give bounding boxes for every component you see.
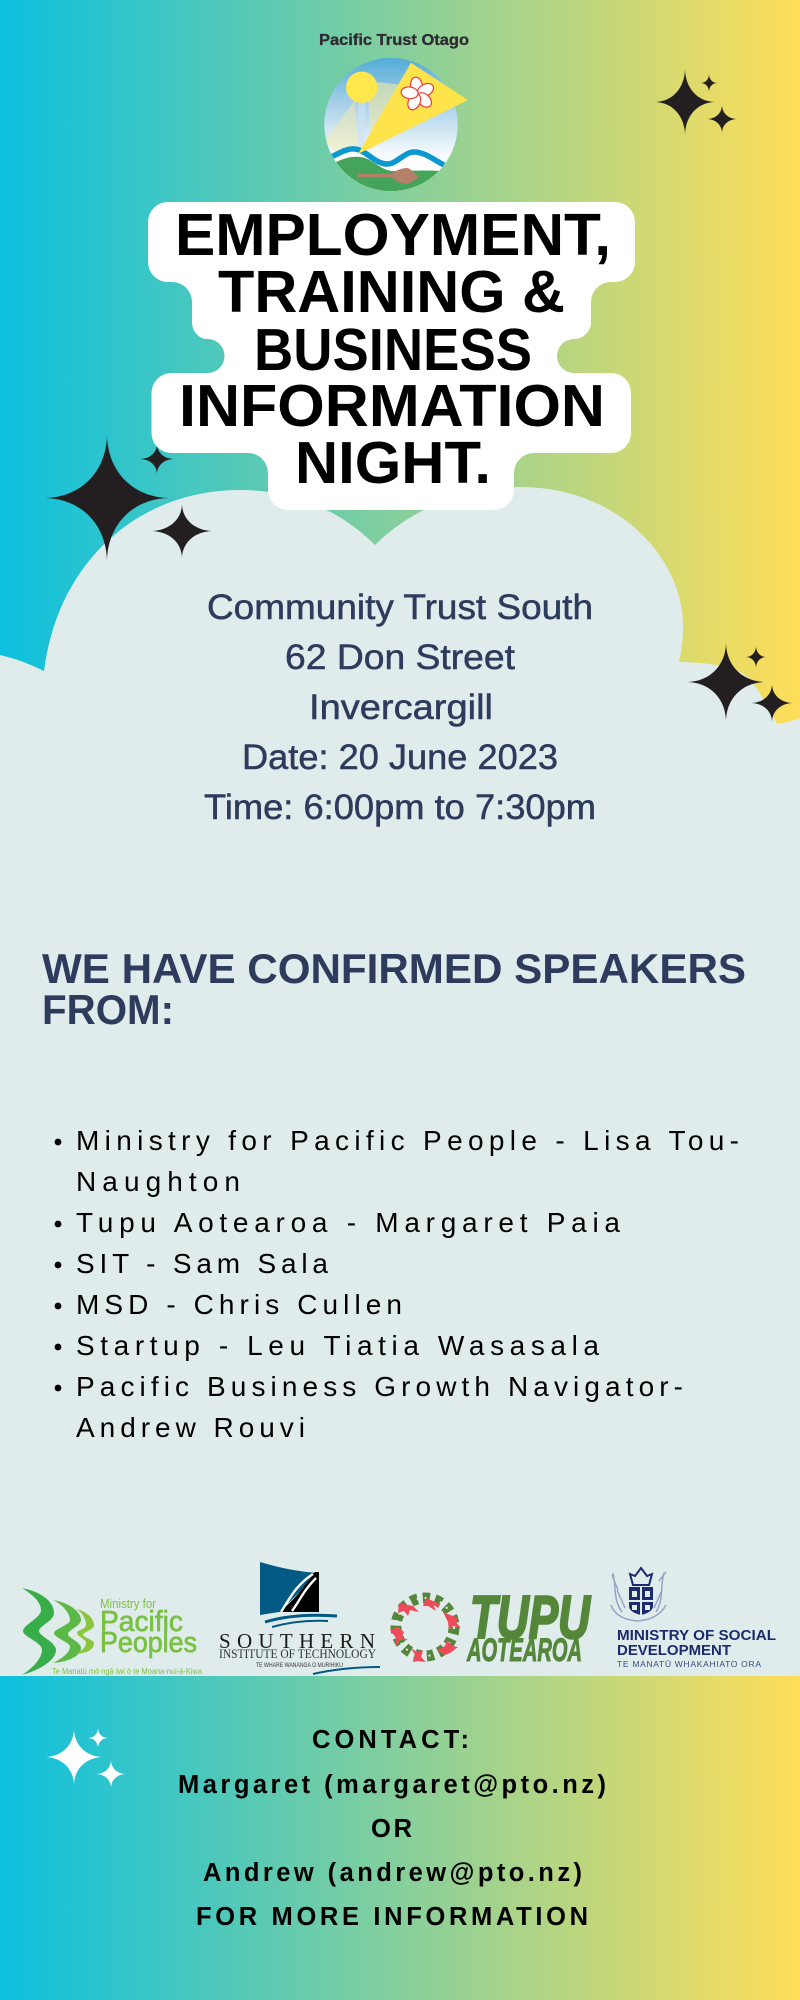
icon: sparkles top right: [655, 69, 737, 135]
venue and time details: [204, 588, 596, 827]
logo: Ministry for Pacific Peoples: Pacific: [100, 1606, 183, 1638]
contact text: Margaret (margaret@pto.nz): [178, 1771, 606, 1799]
contact text: CONTACT:: [312, 1726, 469, 1754]
venue and time details: Community Trust South: [207, 588, 593, 627]
logo: Tupu Aotearoa: [390, 1584, 591, 1668]
title text: EMPLOYMENT,: [175, 202, 611, 268]
speakers list: Naughton: [76, 1166, 240, 1197]
heading: confirmed speakers: [42, 945, 746, 1033]
contact text: FOR MORE INFORMATION: [196, 1903, 588, 1931]
logo: Ministry for Pacific Peoples: Te Manatū mō ngā Iwi ō te Moana-nui-ā-Kiwa: [52, 1666, 202, 1676]
logo: Ministry for Pacific Peoples: Peoples: [100, 1627, 197, 1659]
logo: Ministry for Pacific Peoples: Ministry for: [100, 1596, 157, 1611]
icon: sparkles right of cloud: [687, 643, 793, 722]
venue and time details: Invercargill: [309, 688, 493, 727]
logo: Tupu Aotearoa: TUPU: [470, 1584, 591, 1651]
logo: Southern Institute of Technology: INSTITUTE OF TECHNOLOGY: [219, 1646, 377, 1661]
title text: BUSINESS: [254, 317, 532, 383]
icon: frangipani flower: [400, 76, 436, 112]
contact text: Andrew (andrew@pto.nz): [203, 1859, 582, 1887]
speakers list: Andrew Rouvi: [76, 1412, 305, 1443]
venue and time details: 62 Don Street: [285, 638, 515, 677]
icon: coat of arms: [611, 1568, 666, 1621]
logo: Ministry for Pacific Peoples: [22, 1588, 202, 1676]
logo: Ministry of Social Development: TE MANATŪ WHAKAHIATO ORA: [617, 1659, 761, 1669]
icon: white sparkles footer: [45, 1728, 126, 1788]
heading: confirmed speakers: FROM:: [42, 986, 174, 1033]
logo: Southern Institute of Technology: TE WHARE WANANGA O MURIHIKU: [256, 1663, 343, 1669]
icon: wreath: [390, 1598, 461, 1662]
venue and time details: Time: 6:00pm to 7:30pm: [204, 788, 596, 827]
icon: paddle: [357, 168, 419, 184]
venue and time details: Date: 20 June 2023: [242, 738, 558, 777]
speakers list: Pacific Business Growth Navigator-: [76, 1371, 683, 1402]
organisation name: Pacific Trust Otago: [319, 32, 469, 49]
panel: pale cloud body: [0, 487, 800, 1676]
icon: sparkles left of cloud: [45, 435, 213, 561]
logo: Southern Institute of Technology: SOUTHERN: [219, 1629, 375, 1653]
logo: Ministry of Social Development: MINISTRY OF SOCIAL: [617, 1628, 776, 1644]
contact text: [178, 1726, 606, 1931]
speakers list: MSD - Chris Cullen: [76, 1289, 402, 1320]
speakers list: Tupu Aotearoa - Margaret Paia: [76, 1207, 620, 1238]
panel: contact footer: [0, 1676, 800, 2000]
speakers list: Startup - Leu Tiatia Wasasala: [76, 1330, 599, 1361]
speakers list: SIT - Sam Sala: [76, 1248, 328, 1279]
contact text: OR: [371, 1815, 412, 1843]
title text: INFORMATION: [179, 373, 605, 439]
white stepped title background: [148, 202, 635, 510]
title text: TRAINING &: [218, 259, 565, 325]
title block: [148, 202, 635, 510]
logo: Ministry of Social Development: [611, 1568, 776, 1669]
title text: [175, 202, 611, 496]
speakers list: Ministry for Pacific People - Lisa Tou-: [76, 1125, 739, 1156]
logo: Southern Institute of Technology: [219, 1562, 380, 1674]
logo: Ministry of Social Development: DEVELOPMENT: [617, 1643, 731, 1659]
title text: NIGHT.: [295, 430, 491, 496]
logo: Tupu Aotearoa: AOTEAROA: [466, 1632, 582, 1668]
icon: Pacific Trust Otago logo: [320, 58, 468, 200]
heading: confirmed speakers: WE HAVE CONFIRMED SPEAKERS: [42, 945, 746, 992]
speakers list: [55, 1125, 739, 1443]
